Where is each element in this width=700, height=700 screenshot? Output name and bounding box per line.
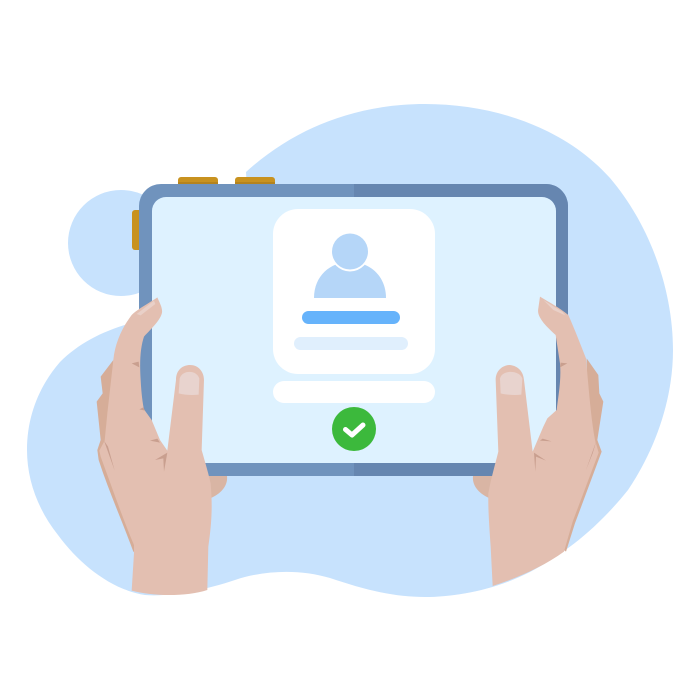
icon: user avatar (314, 232, 386, 298)
fingernail: thumb (179, 372, 199, 395)
back fingers (560, 358, 603, 552)
background blob (27, 104, 673, 597)
fingernail: thumb (500, 372, 522, 395)
profile card (273, 209, 435, 374)
input bar (273, 381, 435, 403)
tablet body (139, 184, 568, 476)
tablet screen (152, 197, 556, 463)
knuckle creases (104, 362, 167, 472)
left hand (97, 297, 212, 595)
right thumb behind tablet (473, 475, 495, 498)
back fingers (97, 360, 142, 556)
right hand (488, 297, 603, 586)
tablet side and top buttons (132, 177, 275, 250)
left thumb behind tablet (205, 475, 227, 498)
icon: green check badge (332, 407, 376, 451)
fingernail: index (137, 301, 155, 315)
knuckle creases (534, 363, 597, 472)
palm and fingers (99, 297, 212, 595)
detail bar (294, 337, 408, 350)
name bar (302, 311, 400, 324)
palm and fingers (488, 297, 599, 586)
fingernail: index (543, 300, 565, 315)
